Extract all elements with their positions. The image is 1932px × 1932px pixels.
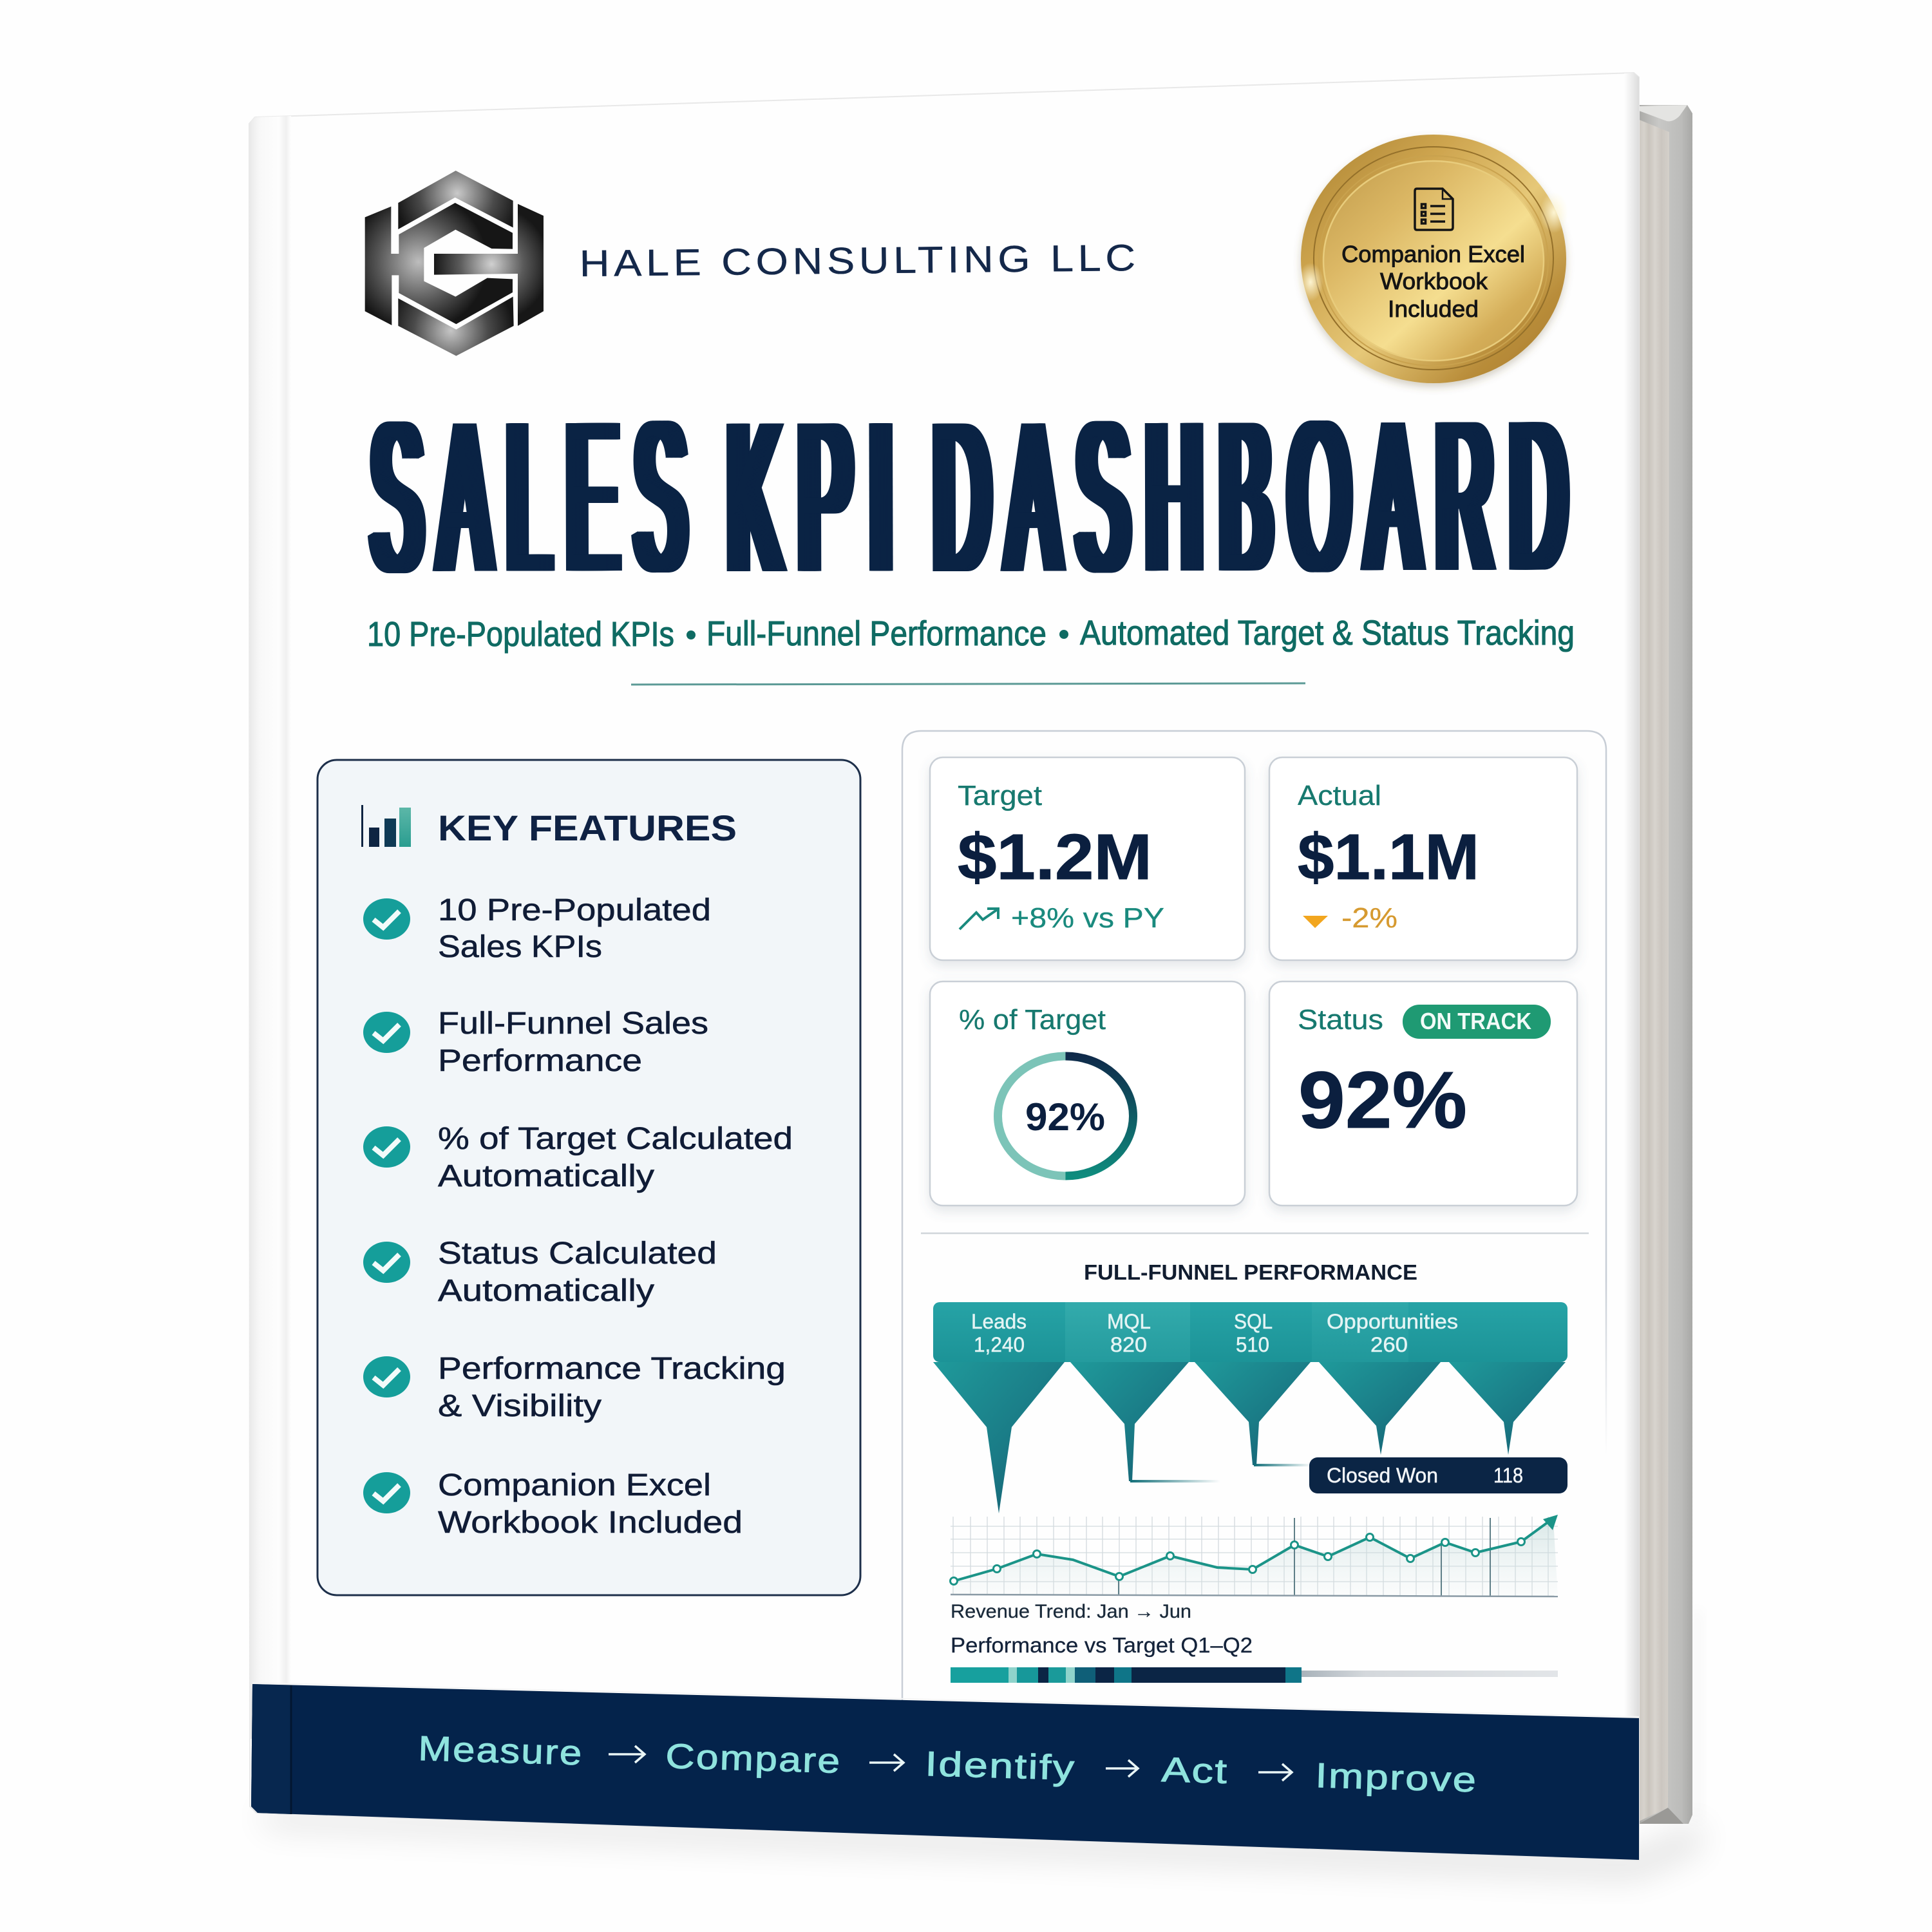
feature 2: Performance [438, 1044, 642, 1078]
seal text: Included [1388, 296, 1479, 322]
title [364, 375, 1577, 617]
book back cover and pages [1636, 105, 1692, 1824]
funnel header bar: Leads [971, 1310, 1027, 1333]
feature 2: Full-Funnel Sales [438, 1007, 708, 1041]
badge: companion workbook seal [1298, 135, 1568, 383]
subtitle: Automated Target & Status Tracking [1080, 614, 1575, 652]
feature 3: Automatically [438, 1159, 654, 1193]
funnel header bar: 820 [1110, 1333, 1147, 1356]
funnel chart [933, 1302, 1567, 1513]
process steps: Identify [925, 1745, 1076, 1788]
card: target: Target [958, 780, 1042, 811]
funnel spouts [933, 1362, 1566, 1513]
funnel header bar: 510 [1236, 1333, 1269, 1356]
process steps: Measure [418, 1729, 583, 1772]
book shadow [264, 1610, 1700, 1877]
heading: full-funnel performance: FULL-FUNNEL PERFORMANCE [1084, 1260, 1417, 1284]
funnel header bar: MQL [1107, 1310, 1151, 1333]
feature 3: % of Target Calculated [438, 1122, 793, 1156]
process steps [418, 1729, 1478, 1799]
bottom band [251, 1683, 1639, 1860]
book front cover [249, 73, 1639, 1860]
closed won box: Closed Won [1327, 1464, 1438, 1487]
card: actual [1269, 757, 1577, 960]
icon: document checklist [1415, 189, 1453, 230]
card: target [930, 757, 1245, 960]
spine band [251, 1684, 291, 1814]
card: percent of target: % of Target [959, 1004, 1106, 1036]
spine highlight [249, 116, 291, 1739]
heading: key features: KEY FEATURES [438, 808, 737, 848]
card: actual: $1.1M [1298, 821, 1479, 893]
gauge ring [998, 1056, 1133, 1176]
on-track pill: ON TRACK [1420, 1008, 1531, 1034]
card: status: 92% [1298, 1056, 1467, 1145]
performance bar [951, 1667, 1558, 1683]
funnel header bar: 260 [1370, 1333, 1408, 1356]
panel: key features [317, 760, 860, 1595]
feature 6 [363, 1468, 743, 1540]
card: percent of target [930, 981, 1245, 1206]
subtitle: Full-Funnel Performance [706, 614, 1046, 653]
feature 3 [363, 1122, 793, 1193]
feature 1: 10 Pre-Populated [438, 893, 711, 927]
card: target: $1.2M [958, 821, 1152, 893]
feature 4: Automatically [438, 1274, 654, 1308]
feature 2 [363, 1007, 708, 1078]
feature 1: Sales KPIs [438, 930, 602, 964]
company name: HALE CONSULTING LLC [579, 237, 1140, 285]
on-track pill [1403, 1005, 1551, 1039]
closed won box [1309, 1457, 1567, 1493]
seal text: Workbook [1380, 268, 1488, 294]
feature 4 [363, 1236, 717, 1308]
subtitle: 10 Pre-Populated KPIs [367, 615, 674, 654]
feature 6: Companion Excel [438, 1468, 711, 1502]
process steps: Act [1161, 1750, 1229, 1791]
feature 5: Performance Tracking [438, 1352, 786, 1386]
logo: hexagon monogram [365, 171, 544, 356]
funnel header bar: 1,240 [974, 1333, 1025, 1356]
card: status: Status [1298, 1004, 1383, 1036]
title: KPI [720, 377, 903, 617]
feature 1 [363, 893, 711, 964]
card: target: +8% vs PY [1011, 902, 1164, 934]
title: DASHBOARD [926, 375, 1577, 617]
seal text: Companion Excel [1341, 241, 1525, 267]
subtitle [367, 614, 1575, 654]
panel: dashboard [902, 731, 1606, 1736]
card: actual: -2% [1341, 902, 1397, 934]
feature 6: Workbook Included [438, 1506, 743, 1540]
process steps: Compare [665, 1737, 842, 1781]
funnel header bar [933, 1302, 1567, 1362]
closed won box: 118 [1493, 1464, 1523, 1487]
card: actual: Actual [1298, 780, 1381, 811]
title: SALES [364, 377, 696, 617]
seal text [1341, 241, 1525, 322]
icon: bar chart [361, 805, 411, 847]
funnel header bar: Opportunities [1327, 1310, 1458, 1333]
process steps: Improve [1315, 1756, 1478, 1799]
feature 5: & Visibility [438, 1389, 601, 1423]
feature 5 [363, 1352, 786, 1423]
card: percent of target: 92% [1025, 1095, 1105, 1139]
feature 4: Status Calculated [438, 1236, 717, 1271]
chart caption: Revenue Trend: Jan → Jun [951, 1601, 1191, 1622]
funnel header bar: SQL [1234, 1310, 1273, 1333]
card: status [1269, 981, 1577, 1206]
performance caption: Performance vs Target Q1–Q2 [951, 1633, 1253, 1657]
line chart: revenue trend [951, 1515, 1558, 1596]
